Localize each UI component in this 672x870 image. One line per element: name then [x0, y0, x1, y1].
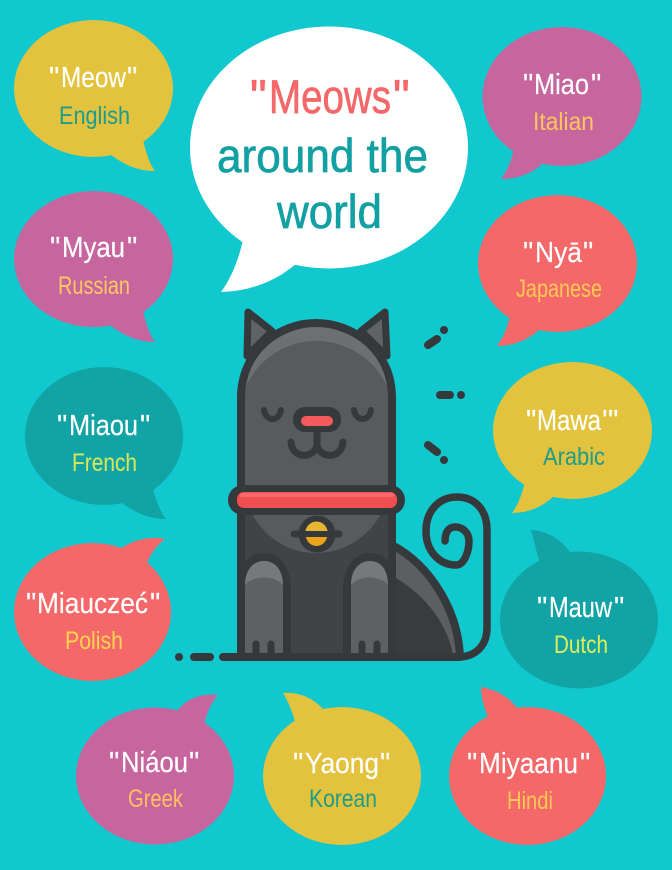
bubble: Italian: ": [591, 69, 601, 101]
bubble: Japanese: Japanese: [516, 275, 602, 303]
title: ": [393, 70, 410, 123]
bubble: English: English: [59, 102, 130, 130]
bubble: Russian: ": [127, 232, 137, 264]
bubble: French: ": [57, 410, 67, 442]
title: world: [276, 185, 382, 238]
meow sound marks: [428, 326, 465, 464]
bubble: French: [25, 367, 183, 519]
cat head shading: [241, 323, 392, 553]
cat ears: [247, 312, 387, 356]
bubble: Arabic: ": [608, 405, 618, 437]
ground line: [175, 653, 460, 661]
bubble: Greek: ": [109, 747, 119, 779]
bubble: Arabic: ': [602, 405, 608, 437]
cat collar: [228, 485, 405, 515]
bubble: Hindi: ": [467, 748, 477, 780]
cat bell: [294, 516, 339, 552]
bubble: Russian: ": [50, 232, 60, 264]
bubble: Dutch: Dutch: [554, 631, 608, 659]
bubble: Greek: [76, 695, 234, 844]
bubble: Hindi: ": [580, 748, 590, 780]
bubble: English: [14, 20, 173, 171]
illustration: black cat: [175, 312, 487, 661]
bubble: Polish: [14, 538, 171, 681]
bubble: Korean: ": [293, 748, 303, 780]
cat outline: [241, 323, 392, 657]
bubble: Greek: Niáou: [121, 747, 188, 779]
bubble: Japanese: Nyā: [535, 237, 583, 269]
bubble: Japanese: [478, 195, 637, 346]
bubble: Korean: [263, 693, 421, 845]
bubble: Arabic: Mawa: [537, 405, 602, 437]
cat face: [264, 407, 371, 455]
bubble: Polish: ": [150, 588, 160, 620]
title bubble: [190, 26, 468, 292]
bubble: Dutch: ": [614, 592, 624, 624]
bubble: Italian: ": [523, 69, 533, 101]
bubble: Korean: Korean: [309, 785, 377, 813]
bubble: Russian: Myau: [62, 232, 125, 264]
cat tail: [426, 497, 487, 657]
bubble: French: French: [72, 449, 137, 477]
bubble: Arabic: Arabic: [543, 443, 605, 471]
cat haunch: [392, 545, 460, 657]
bubble: Polish: ": [26, 588, 36, 620]
bubble: French: ": [140, 410, 150, 442]
bubble: Dutch: Mauw: [549, 592, 613, 624]
bubble: Dutch: ": [537, 592, 547, 624]
title: around the: [217, 129, 428, 182]
bubble: Hindi: Miyaanu: [479, 748, 578, 780]
bubble: English: Meow: [61, 62, 127, 94]
bubble: Greek: Greek: [128, 785, 183, 813]
cat left leg: [241, 557, 287, 657]
bubble: Italian: Italian: [533, 108, 594, 136]
cat right leg: [347, 557, 392, 657]
bubble: English: ": [127, 62, 137, 94]
bubble: Korean: ": [380, 748, 390, 780]
bubble: Polish: Miauczeć: [37, 588, 148, 620]
bubble: Dutch: [500, 530, 658, 688]
bubble: Japanese: ": [583, 237, 593, 269]
title: Meows: [269, 70, 391, 123]
bubble: Korean: Yaong: [305, 748, 379, 780]
bubble: Italian: [482, 27, 642, 179]
bubble: Japanese: ": [523, 237, 533, 269]
bubble: Arabic: [493, 362, 652, 513]
bubble: Italian: Miao: [534, 69, 589, 101]
bubble: Arabic: ": [526, 405, 536, 437]
cat body: [241, 323, 392, 657]
title: [217, 70, 428, 238]
bubble: Russian: [14, 191, 173, 342]
bubble: Hindi: Hindi: [507, 787, 553, 815]
bubble: Greek: ": [189, 747, 199, 779]
bubble: English: ": [49, 62, 59, 94]
bubble: Russian: Russian: [58, 272, 130, 300]
bubble: Polish: Polish: [65, 627, 123, 655]
title: ": [250, 70, 267, 123]
bubble: French: Miaou: [69, 410, 138, 442]
bubble: Hindi: [449, 687, 606, 845]
